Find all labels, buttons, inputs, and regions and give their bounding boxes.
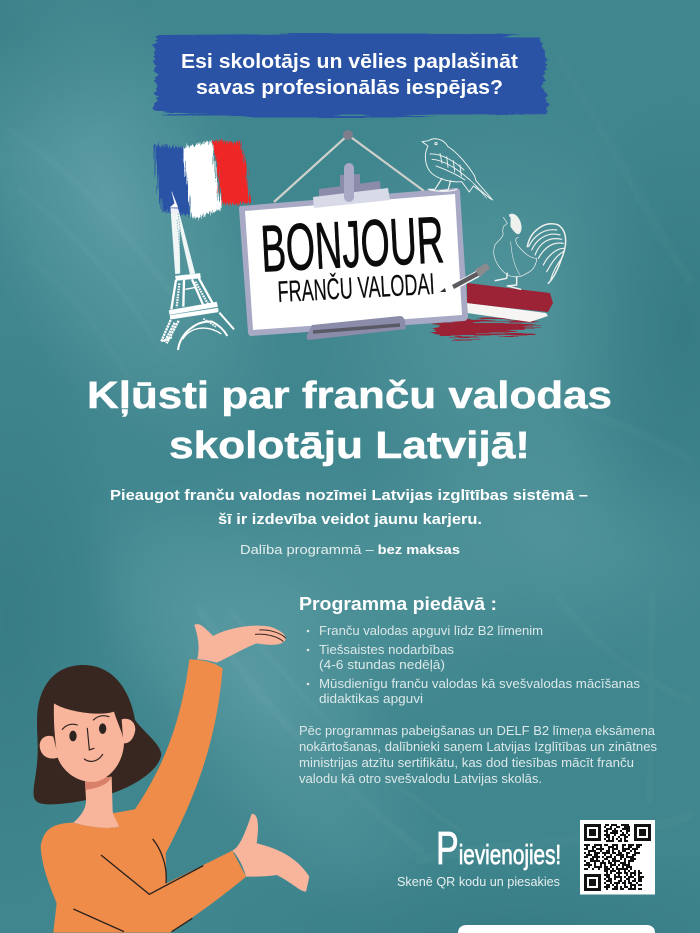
board subheading: FRANČU VALODAI <box>277 267 435 309</box>
banner: question on blue brush stroke <box>154 34 547 117</box>
icon: rooster <box>494 214 566 289</box>
free participation note: Dalība programmā – bez maksas <box>240 542 460 557</box>
QR code <box>580 820 655 894</box>
icon: bird <box>422 139 493 200</box>
icon: marker pen <box>440 265 488 292</box>
hair <box>33 665 161 804</box>
call to action: join: Pievienojies! <box>436 822 561 874</box>
programme list: Franču valodas apguvi līdz B2 līmenim <box>319 623 543 638</box>
programme list: Mūsdienīgu franču valodas kā svešvalodas mācīšanas <box>319 676 641 691</box>
subheading: šī ir izdevība veidot jaunu karjeru. <box>218 511 482 528</box>
board frame <box>239 188 468 336</box>
paragraph: certificate: nokārtošanas, dalībnieki saņem Latvijas Izglītības un zinātnes <box>299 739 657 754</box>
sweater <box>41 659 246 933</box>
pin <box>343 130 353 140</box>
illustration: hanging whiteboard <box>239 130 468 340</box>
programme list: (4-6 stundas nedēļā) <box>319 657 445 672</box>
caption: scan QR: Skenē QR kodu un piesakies <box>397 874 560 889</box>
icon: Latvian flag brush <box>432 283 553 337</box>
banner: question on blue brush stroke: Esi skolotājs un vēlies paplašināt <box>181 50 518 73</box>
main heading: skolotāju Latvijā! <box>169 425 530 467</box>
clip knob <box>344 163 354 202</box>
bottom white button <box>458 925 655 933</box>
clip back <box>319 174 381 199</box>
icon: Eiffel tower <box>161 192 234 350</box>
icon: French flag brush <box>154 141 250 219</box>
lower hand <box>232 814 309 892</box>
board heading: BONJOUR: BONJOUR <box>259 202 446 286</box>
board surface <box>245 194 462 330</box>
neck <box>73 777 119 828</box>
eyes <box>69 731 77 741</box>
paragraph: certificate: Pēc programmas pabeigšanas un DELF B2 līmeņa eksāmena <box>299 723 656 738</box>
main heading <box>87 375 612 467</box>
banner: question on blue brush stroke: savas profesionālās iespējas? <box>196 76 503 99</box>
clip <box>313 188 390 208</box>
programme list: Tiešsaistes nodarbības <box>319 642 455 657</box>
ears <box>40 719 135 758</box>
main heading: Kļūsti par franču valodas <box>87 375 612 417</box>
subheading: Pieaugot franču valodas nozīmei Latvijas izglītības sistēmā – <box>110 487 588 504</box>
paragraph: certificate <box>299 723 657 786</box>
brows, nose and mouth <box>62 716 109 761</box>
section heading: programme offers: Programma piedāvā : <box>299 593 497 614</box>
programme list <box>307 623 641 706</box>
face <box>54 703 124 782</box>
paragraph: certificate: ministrijas atzītu sertifikātu, kas dod tiesības mācīt franču <box>299 755 634 770</box>
subheading <box>110 487 588 528</box>
hanging string <box>274 135 424 202</box>
paragraph: certificate: valodu kā otro svešvalodu Latvijas skolās. <box>299 771 542 786</box>
raised hand <box>194 624 286 663</box>
finger lines <box>255 630 286 642</box>
illustration: teacher presenting <box>33 624 309 933</box>
sweater fold lines <box>73 839 203 932</box>
programme list: didaktikas apguvi <box>319 691 423 706</box>
tray <box>307 316 406 340</box>
